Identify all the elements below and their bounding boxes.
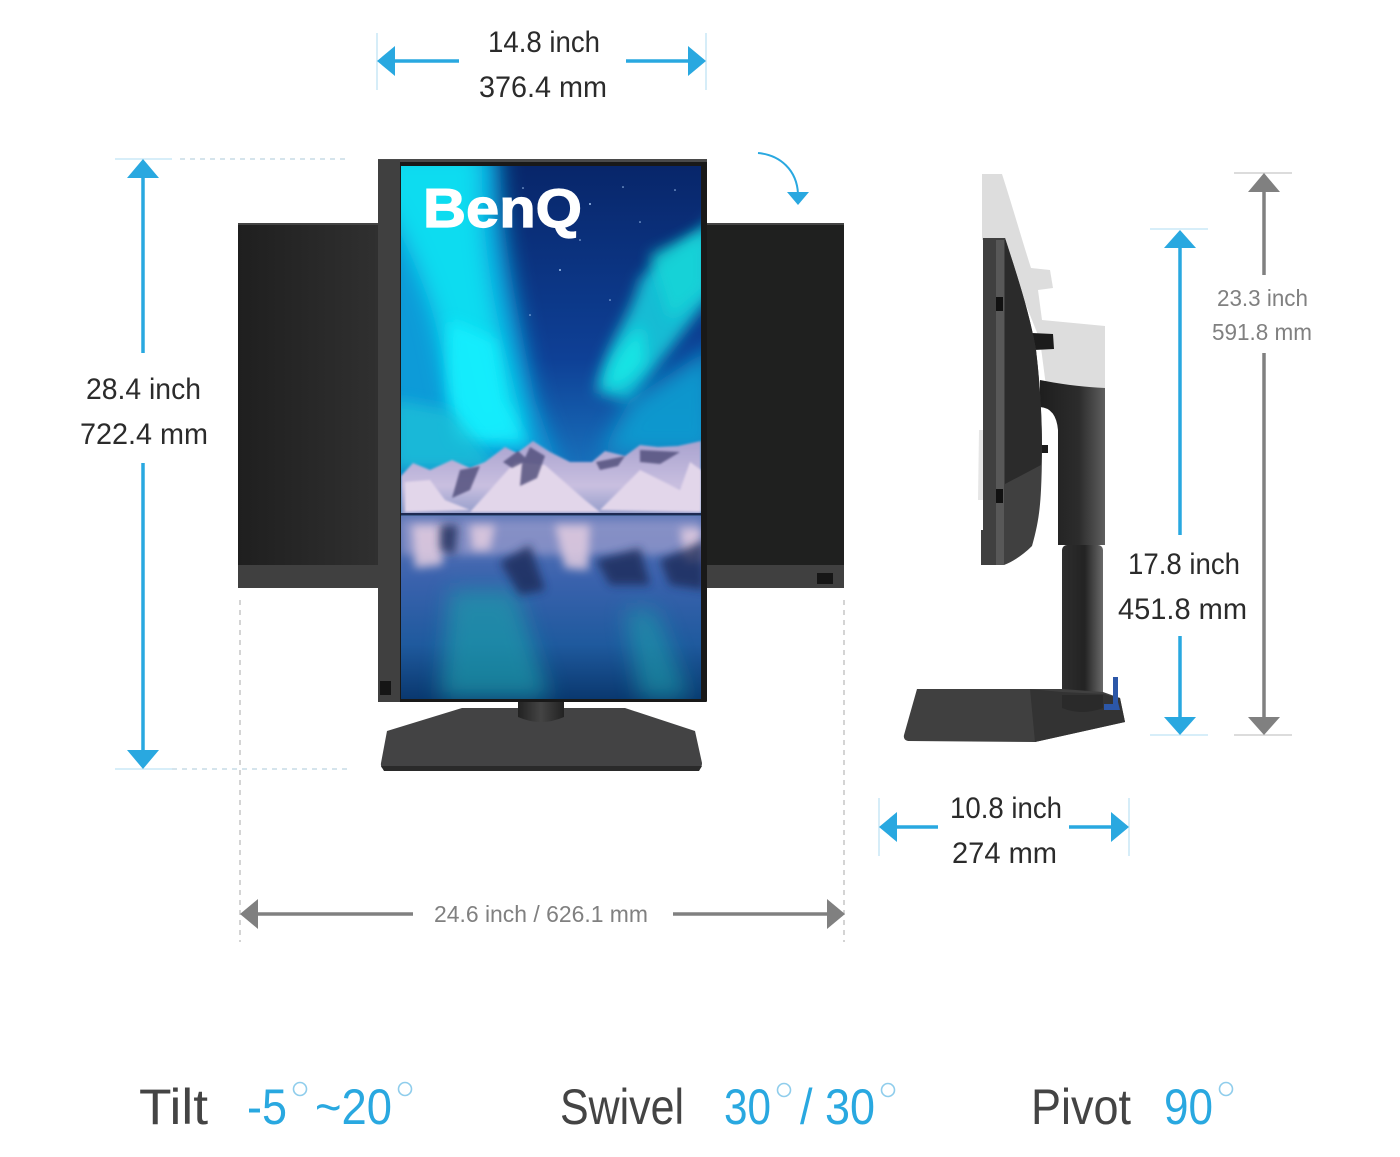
- dimension: height 17.8 inch: [1118, 229, 1247, 735]
- spec: tilt: [139, 1079, 412, 1135]
- spec: tilt: -5: [247, 1079, 287, 1135]
- vent strip: [996, 240, 1004, 565]
- dimension: depth 10.8 inch: 274 mm: [952, 837, 1057, 870]
- screen image: aurora over mountains: [401, 166, 701, 699]
- spec: swivel: [560, 1079, 894, 1135]
- spec: tilt: Tilt: [139, 1079, 208, 1135]
- blue cable clip: [1104, 677, 1120, 710]
- monitor body: [981, 238, 1042, 565]
- spec: swivel: Swivel: [560, 1079, 684, 1135]
- base: [904, 689, 1125, 742]
- dimension: height 28.4 inch: 28.4 inch: [86, 373, 201, 406]
- lake reflection: [401, 516, 705, 699]
- dimension: height 17.8 inch: 17.8 inch: [1128, 548, 1240, 581]
- pole: [1062, 545, 1103, 713]
- back panel: swivel left: [238, 223, 380, 588]
- dimension: width 14.8 inch: 14.8 inch: [488, 26, 600, 59]
- dimension: width 14.8 inch: [377, 26, 706, 104]
- dimension: height 23.3 inch: [1212, 173, 1312, 735]
- dimension: width 24.6 inch: 24.6 inch / 626.1 mm: [434, 901, 648, 927]
- monitor bezel: [378, 159, 707, 702]
- dimension: width 24.6 inch: [240, 600, 845, 942]
- dimension: height 28.4 inch: [80, 159, 350, 769]
- pole foot: [1062, 695, 1103, 712]
- dimension: height 23.3 inch: 23.3 inch: [1217, 285, 1308, 311]
- spec: pivot: 90: [1164, 1079, 1213, 1135]
- ports: [996, 297, 1003, 503]
- stand arm: [1040, 380, 1105, 545]
- ghost tilted monitor: [982, 174, 1105, 392]
- mountains: [401, 441, 701, 516]
- dimension: height 23.3 inch: 591.8 mm: [1212, 319, 1312, 345]
- spec: pivot: Pivot: [1031, 1079, 1131, 1135]
- base facet: [1030, 689, 1125, 742]
- dimension: depth 10.8 inch: 10.8 inch: [950, 792, 1062, 825]
- spec: pivot: [1031, 1079, 1232, 1135]
- dimension: height 28.4 inch: 722.4 mm: [80, 418, 208, 451]
- aurora left band: [401, 166, 564, 476]
- front stand: [381, 700, 702, 771]
- back panel: swivel right: [705, 223, 844, 588]
- stars: [522, 186, 676, 316]
- aurora right band: [596, 215, 715, 455]
- BenQ logo: BenQ: [423, 178, 582, 239]
- spec: swivel: 30: [724, 1079, 771, 1135]
- dimension: height 17.8 inch: 451.8 mm: [1118, 593, 1247, 626]
- pivot arrow: [758, 153, 809, 205]
- dimension: depth 10.8 inch: [879, 792, 1129, 870]
- dimension: width 14.8 inch: 376.4 mm: [479, 71, 607, 104]
- spec: tilt: ~20: [315, 1079, 392, 1135]
- side view monitor: [904, 174, 1125, 742]
- rear panel shade: [1005, 238, 1042, 484]
- ghost lower edge: [978, 430, 983, 500]
- hinge blocks: [1032, 333, 1054, 453]
- spec: swivel: / 30: [800, 1079, 875, 1135]
